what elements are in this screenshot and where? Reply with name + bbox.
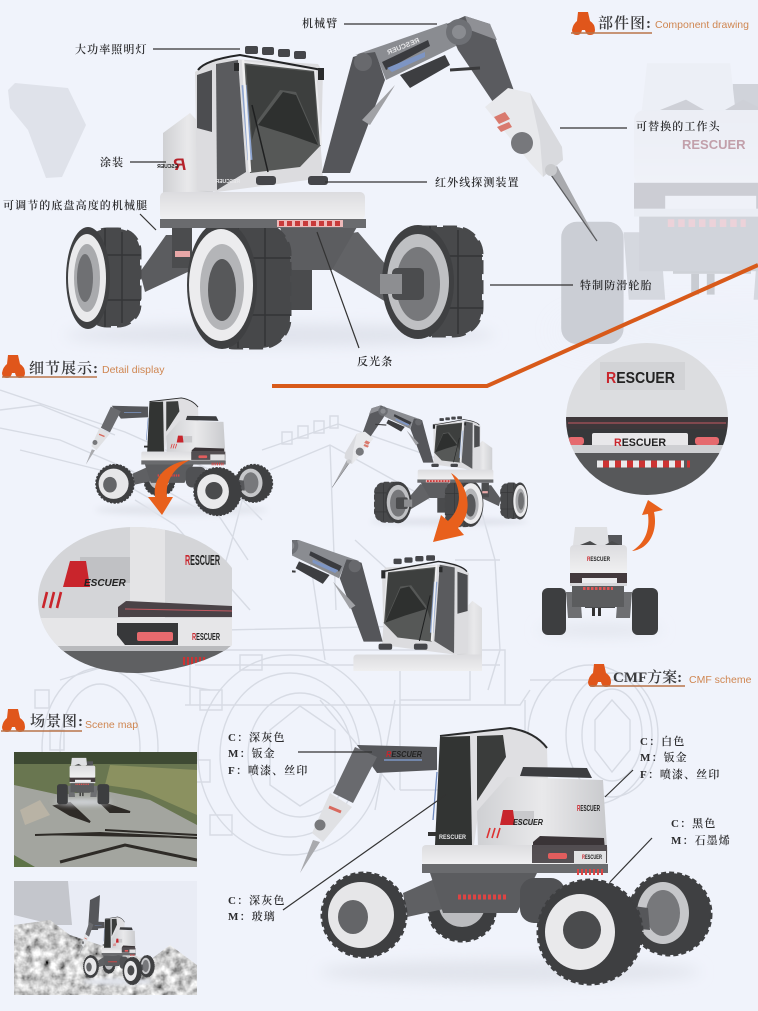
- heading: detail display: Detail display: [102, 364, 165, 376]
- zoom circle: side logo detail: RESCUER: [185, 552, 220, 569]
- CMF callout: body: C：白色: [640, 734, 685, 748]
- label: leg: [3, 198, 156, 230]
- CMF callout: body: [605, 734, 720, 797]
- heading: component drawing: [571, 12, 749, 35]
- label: lights: 大功率照明灯: [75, 42, 148, 56]
- CMF callout: tyre: M：石墨烯: [671, 833, 731, 847]
- zoom circle: side logo detail: RESCUER: [192, 632, 220, 643]
- mirrored logo text on body: ESCUER: [157, 164, 178, 170]
- heading: CMF scheme: CMF方案:: [613, 669, 682, 686]
- main logo on body: R: [173, 155, 186, 174]
- CMF callout: arm: F：喷漆、丝印: [228, 763, 308, 777]
- logo on plate: RESCUER: [582, 855, 602, 861]
- CMF callout: tyre: [610, 816, 731, 882]
- label: paint: [100, 155, 166, 169]
- mirrored logo on cab panel: RESCUER: [215, 179, 240, 185]
- label: arm: [302, 16, 437, 30]
- arrow curved down: [433, 473, 468, 542]
- CMF callout: body: M：钣金: [640, 750, 688, 764]
- faded rescuer logo: RESCUER: [682, 137, 746, 152]
- mirrored logo on arm: RESCUER: [386, 37, 421, 57]
- CMF callout: arm: M：钣金: [228, 746, 276, 760]
- CMF callout: tyre: C：黑色: [671, 816, 716, 830]
- label: tyre: 特制防滑轮胎: [580, 278, 653, 292]
- heading: CMF scheme: [588, 664, 752, 687]
- logo on body: ESCUER: [513, 818, 543, 827]
- heading: component drawing: Component drawing: [655, 19, 749, 31]
- zoom circle: side logo detail: ESCUER: [84, 578, 126, 589]
- CMF excavator: [300, 728, 711, 984]
- enlarged cab and arm: [292, 540, 482, 671]
- scene photo: collapsed building rubble: [14, 881, 197, 995]
- CMF callout: glass: M：玻璃: [228, 909, 276, 923]
- label: reflector: 反光条: [357, 354, 393, 368]
- main excavator: [65, 16, 597, 349]
- CMF callout: body: F：喷漆、丝印: [640, 767, 720, 781]
- CMF callout: glass: C：深灰色: [228, 893, 285, 907]
- faded bucket: [8, 83, 86, 178]
- small excavator rear view: [538, 527, 662, 636]
- heading: CMF scheme: CMF scheme: [689, 674, 752, 686]
- rear logo: RESCUER: [587, 556, 610, 563]
- CMF callout: arm: C：深灰色: [228, 730, 285, 744]
- label: leg: 可调节的底盘高度的机械腿: [3, 198, 148, 212]
- logo on arm: RESCUER: [386, 750, 422, 759]
- label: arm: 机械臂: [302, 16, 338, 30]
- arrow curved up: [632, 500, 663, 551]
- arrow down left: [148, 460, 190, 515]
- label: paint: 涂装: [100, 155, 124, 169]
- heading: scene map: 场景图:: [30, 712, 84, 730]
- zoom circle: rear logo detail: RESCUER: [614, 437, 666, 449]
- logo right: RESCUER: [577, 804, 600, 813]
- heading: scene map: [1, 709, 138, 732]
- CMF callout: arm: [228, 730, 372, 777]
- zoom circle: rear logo detail: [566, 343, 728, 495]
- zoom circle: side logo detail: [38, 527, 232, 673]
- small excavator side view: [86, 398, 272, 515]
- heading: detail display: [2, 355, 165, 378]
- label: tool head: 可替换的工作头: [636, 119, 721, 133]
- faded rear view: [551, 63, 758, 347]
- background line art excavator: [0, 390, 658, 855]
- label: reflector: [317, 232, 393, 368]
- orange divider line: [272, 265, 758, 386]
- heading: detail display: 细节展示:: [29, 359, 99, 377]
- logo on cab: RESCUER: [439, 834, 466, 841]
- zoom circle: rear logo detail: RESCUER: [606, 370, 675, 387]
- small excavator front view: [332, 405, 528, 527]
- heading: component drawing: 部件图:: [598, 15, 652, 32]
- scene photo: damaged road: [14, 752, 197, 867]
- label: infrared: 红外线探测装置: [435, 175, 520, 189]
- CMF callout: glass: [228, 794, 447, 923]
- heading: scene map: Scene map: [85, 719, 138, 731]
